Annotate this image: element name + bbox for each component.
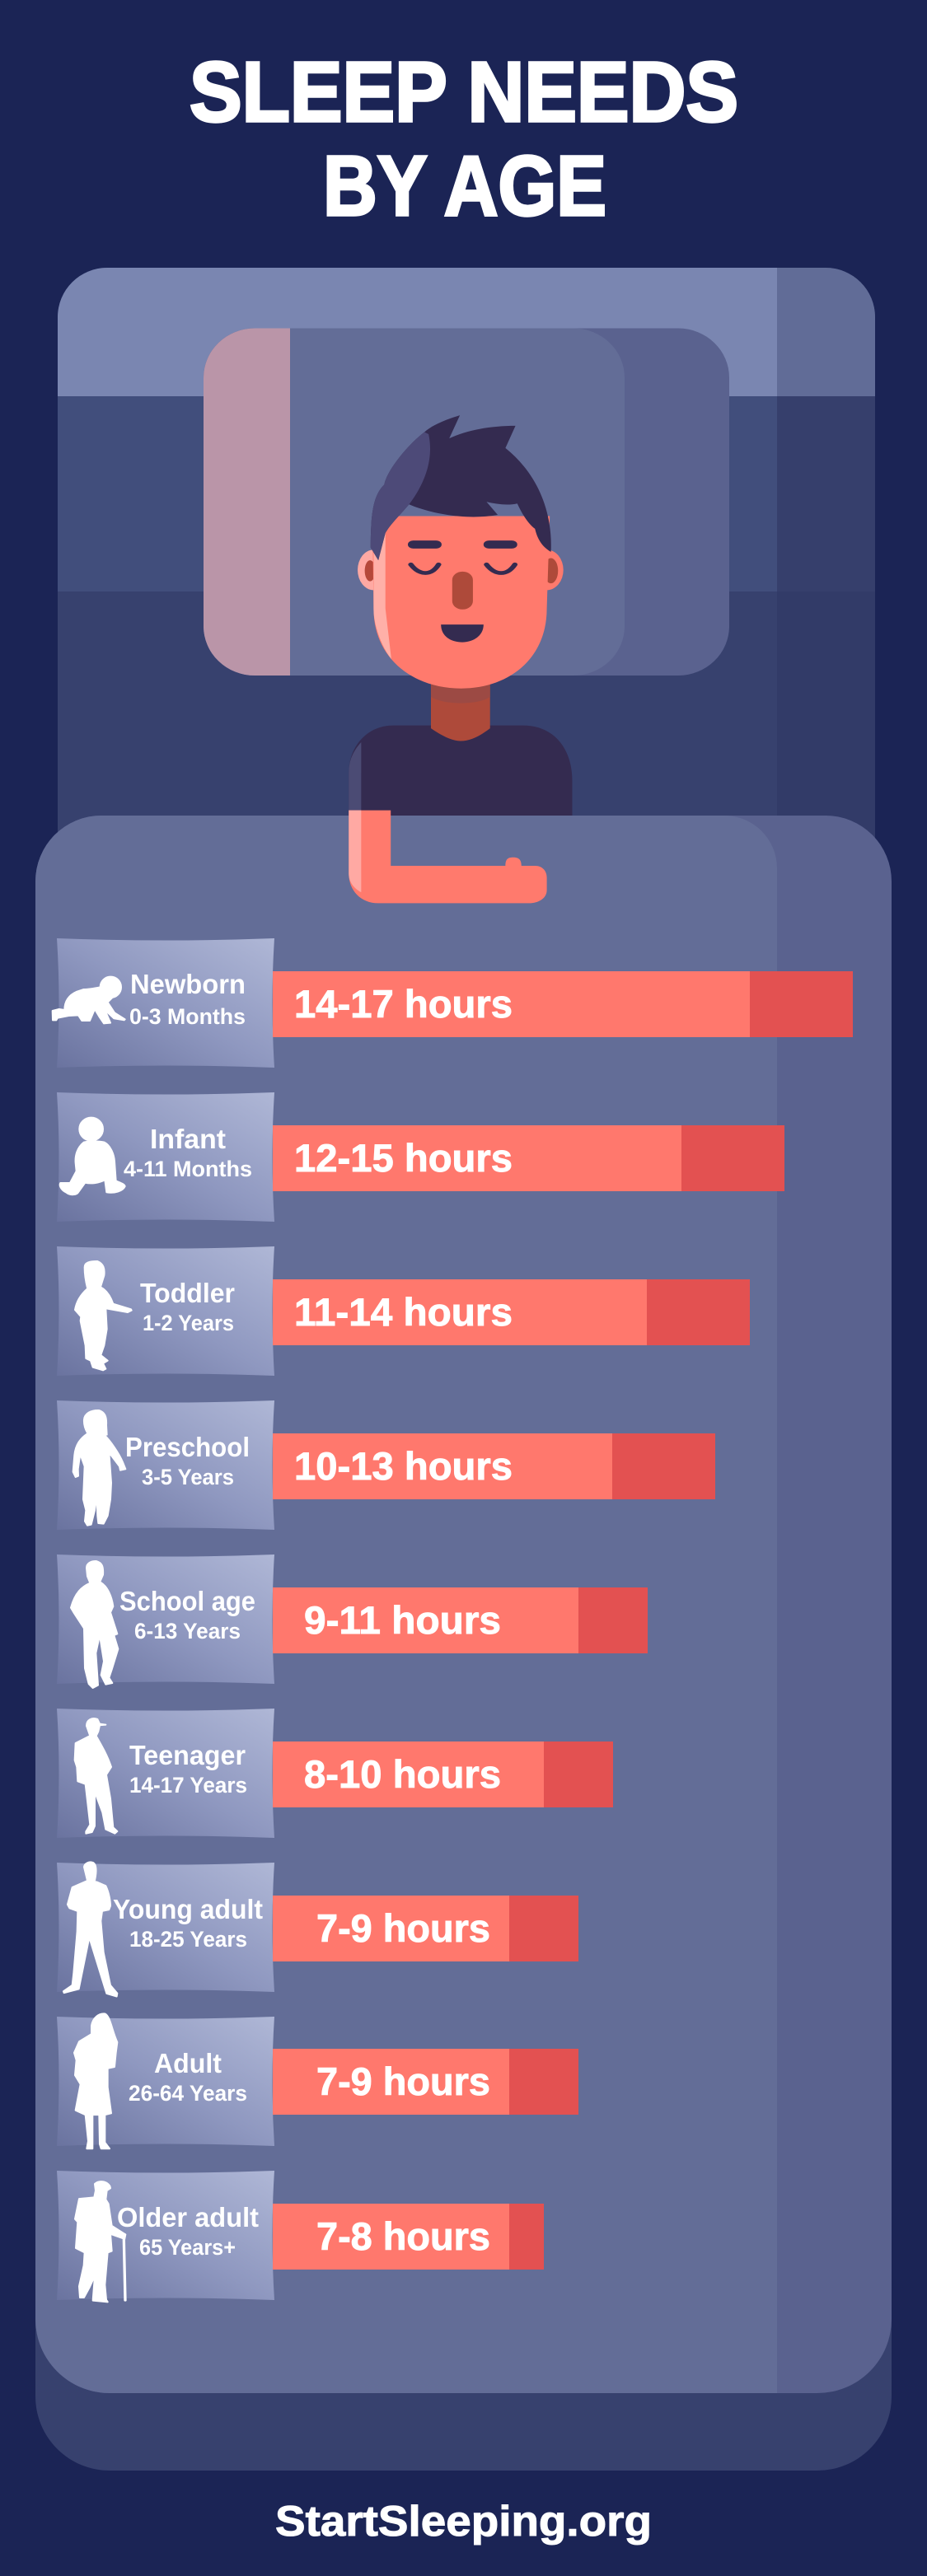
row: adult	[57, 2013, 578, 2148]
label card	[57, 2017, 274, 2146]
label text: Young adult	[113, 1894, 263, 1924]
label text	[124, 1124, 252, 1181]
icon: hair	[371, 415, 551, 560]
bar: 7-9 hours: 7-9 hours	[316, 1906, 490, 1950]
icon: crawling baby silhouette	[53, 977, 125, 1023]
title: BY AGE	[323, 138, 606, 233]
footer: website: StartSleeping.org	[275, 2498, 652, 2546]
bar: 10-13 hours	[273, 1433, 715, 1499]
label card	[57, 1246, 274, 1376]
label card	[57, 1709, 274, 1838]
bar: 11-14 hours	[273, 1279, 750, 1345]
label text	[125, 1432, 250, 1489]
icon: left ear	[358, 549, 390, 590]
label text: 18-25 Years	[129, 1927, 247, 1952]
label text	[140, 1278, 235, 1335]
label text: Toddler	[140, 1278, 235, 1308]
label text	[119, 1586, 255, 1643]
row: preschool	[57, 1400, 715, 1530]
label text: 3-5 Years	[142, 1465, 234, 1489]
row: older adult	[57, 2171, 544, 2302]
icon: toddler silhouette	[75, 1261, 132, 1370]
title	[190, 44, 738, 233]
row: teenager	[57, 1709, 613, 1838]
title: SLEEP NEEDS	[190, 44, 738, 139]
bar: 7-8 hours	[273, 2204, 544, 2270]
label card	[57, 2171, 274, 2300]
bar: 11-14 hours: 11-14 hours	[294, 1290, 513, 1334]
sleeping person: shirt and neck	[349, 685, 572, 819]
row: toddler	[57, 1246, 750, 1376]
label text: Infant	[150, 1124, 226, 1154]
bar: 14-17 hours	[273, 971, 853, 1037]
panel: blanket	[35, 816, 892, 2393]
label card	[57, 1400, 274, 1530]
bar: 7-9 hours: 7-9 hours	[316, 2059, 490, 2103]
bar: 12-15 hours	[273, 1125, 784, 1191]
icon: young adult silhouette	[63, 1863, 117, 1996]
label card	[57, 1092, 274, 1222]
icon: eyebrows	[408, 540, 517, 549]
icon: older adult with cane silhouette	[75, 2181, 126, 2302]
bar: 14-17 hours: 14-17 hours	[294, 982, 513, 1026]
label text: 0-3 Months	[129, 1004, 246, 1029]
label text	[117, 2202, 259, 2260]
bar: 12-15 hours: 12-15 hours	[294, 1136, 513, 1180]
label text: 14-17 Years	[129, 1773, 247, 1798]
label text: Preschool	[125, 1432, 250, 1462]
label text: 6-13 Years	[134, 1619, 241, 1643]
label text: 65 Years+	[139, 2235, 236, 2260]
label text	[129, 1740, 247, 1798]
bar: 8-10 hours: 8-10 hours	[304, 1752, 501, 1796]
icon: adult woman silhouette	[74, 2013, 117, 2148]
label card	[57, 1863, 274, 1992]
icon: school child silhouette	[71, 1561, 118, 1688]
icon: sitting baby silhouette	[60, 1118, 125, 1194]
label text: Older adult	[117, 2202, 259, 2232]
label text: 26-64 Years	[129, 2081, 247, 2106]
label card	[57, 938, 274, 1068]
label text	[129, 969, 246, 1029]
label text: School age	[119, 1586, 255, 1616]
icon: right ear	[531, 549, 564, 590]
icon: closed eyes	[411, 564, 515, 573]
bar: 10-13 hours: 10-13 hours	[294, 1444, 513, 1488]
bar: 7-9 hours	[273, 2049, 578, 2115]
row: newborn	[53, 938, 853, 1068]
label text: Teenager	[129, 1740, 246, 1770]
bar: 7-9 hours	[273, 1896, 578, 1961]
row: young adult	[57, 1863, 578, 1996]
label text: 1-2 Years	[143, 1311, 234, 1335]
icon: teenager silhouette	[75, 1718, 117, 1834]
label text	[113, 1894, 263, 1952]
label text: Newborn	[130, 969, 246, 999]
sleeping person: head	[358, 415, 564, 689]
row: school age	[57, 1554, 648, 1688]
icon: preschooler silhouette	[73, 1410, 125, 1526]
row: infant	[57, 1092, 784, 1222]
label text: Adult	[154, 2048, 222, 2078]
label text: 4-11 Months	[124, 1157, 252, 1181]
label text	[129, 2048, 247, 2106]
panel: bed frame and sheet	[35, 268, 892, 2471]
bar: 9-11 hours: 9-11 hours	[304, 1598, 501, 1642]
icon: arm over blanket	[349, 811, 547, 903]
icon: nose	[452, 572, 473, 610]
bar: 7-8 hours: 7-8 hours	[316, 2214, 490, 2258]
icon: mouth	[441, 624, 484, 643]
bar: 9-11 hours	[273, 1587, 648, 1653]
panel: pillow	[204, 328, 729, 676]
icon: face	[372, 517, 550, 689]
bar: 8-10 hours	[273, 1741, 613, 1807]
label card	[57, 1554, 274, 1684]
